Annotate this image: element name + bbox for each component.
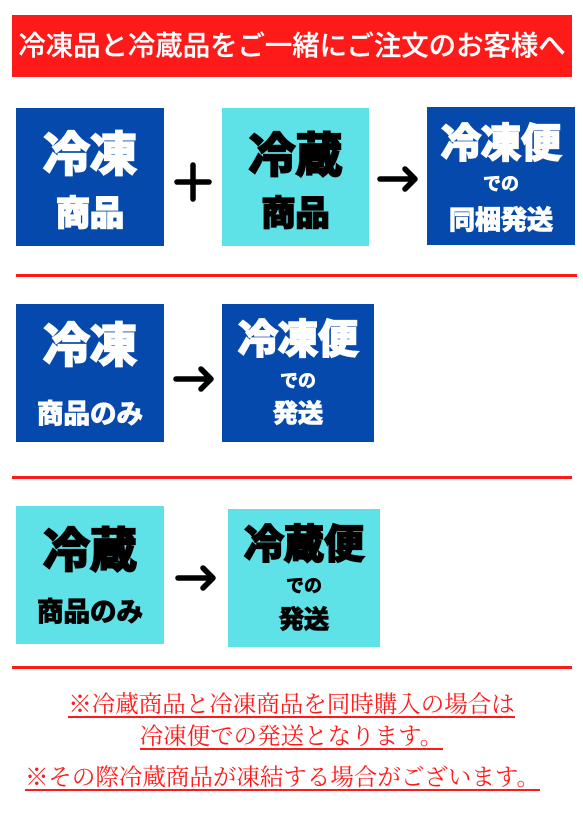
panel: chilled only: 冷蔵 bbox=[43, 524, 137, 577]
icon: arrow bbox=[175, 565, 216, 591]
panel: chilled delivery: での bbox=[286, 576, 322, 596]
panel: frozen delivery bbox=[222, 304, 374, 442]
panel: chilled goods bbox=[222, 108, 369, 246]
icon: plus bbox=[174, 162, 212, 202]
panel: frozen goods: 冷凍 bbox=[43, 128, 137, 181]
divider bbox=[12, 476, 572, 479]
icon: arrow bbox=[377, 166, 418, 192]
panel: frozen delivery combined bbox=[427, 107, 575, 245]
title banner: 冷凍品と冷蔵品をご一緒にご注文のお客様へ bbox=[18, 30, 566, 61]
panel: frozen only: 冷凍 bbox=[43, 319, 137, 372]
panel: frozen delivery: 冷凍便 bbox=[238, 318, 358, 362]
panel: chilled delivery: 発送 bbox=[279, 606, 329, 634]
panel: chilled goods: 冷蔵 bbox=[248, 129, 342, 182]
icon: arrow bbox=[173, 366, 214, 392]
note line 3: ※その際冷蔵商品が凍結する場合がございます。 bbox=[25, 765, 540, 791]
panel: chilled delivery: 冷蔵便 bbox=[244, 523, 364, 567]
panel: frozen goods bbox=[16, 108, 164, 246]
panel: frozen only bbox=[16, 304, 164, 442]
panel: chilled delivery bbox=[228, 509, 380, 647]
panel: frozen goods: 商品 bbox=[56, 195, 124, 233]
note line 2: 冷凍便での発送となります。 bbox=[140, 724, 443, 750]
panel: frozen delivery combined: 冷凍便 bbox=[441, 122, 561, 166]
panel: chilled only: 商品のみ bbox=[37, 597, 143, 627]
panel: chilled only bbox=[16, 506, 164, 644]
panel: frozen delivery combined: 同梱発送 bbox=[449, 205, 553, 235]
panel: frozen delivery: 発送 bbox=[273, 400, 323, 428]
divider bbox=[12, 666, 572, 669]
panel: chilled goods: 商品 bbox=[262, 195, 330, 233]
divider bbox=[16, 274, 577, 277]
title banner bbox=[12, 15, 572, 77]
panel: frozen delivery combined: での bbox=[483, 174, 519, 194]
note line 1: ※冷蔵商品と冷凍商品を同時購入の場合は bbox=[68, 692, 515, 718]
panel: frozen delivery: での bbox=[280, 371, 316, 391]
panel: frozen only: 商品のみ bbox=[37, 399, 143, 429]
